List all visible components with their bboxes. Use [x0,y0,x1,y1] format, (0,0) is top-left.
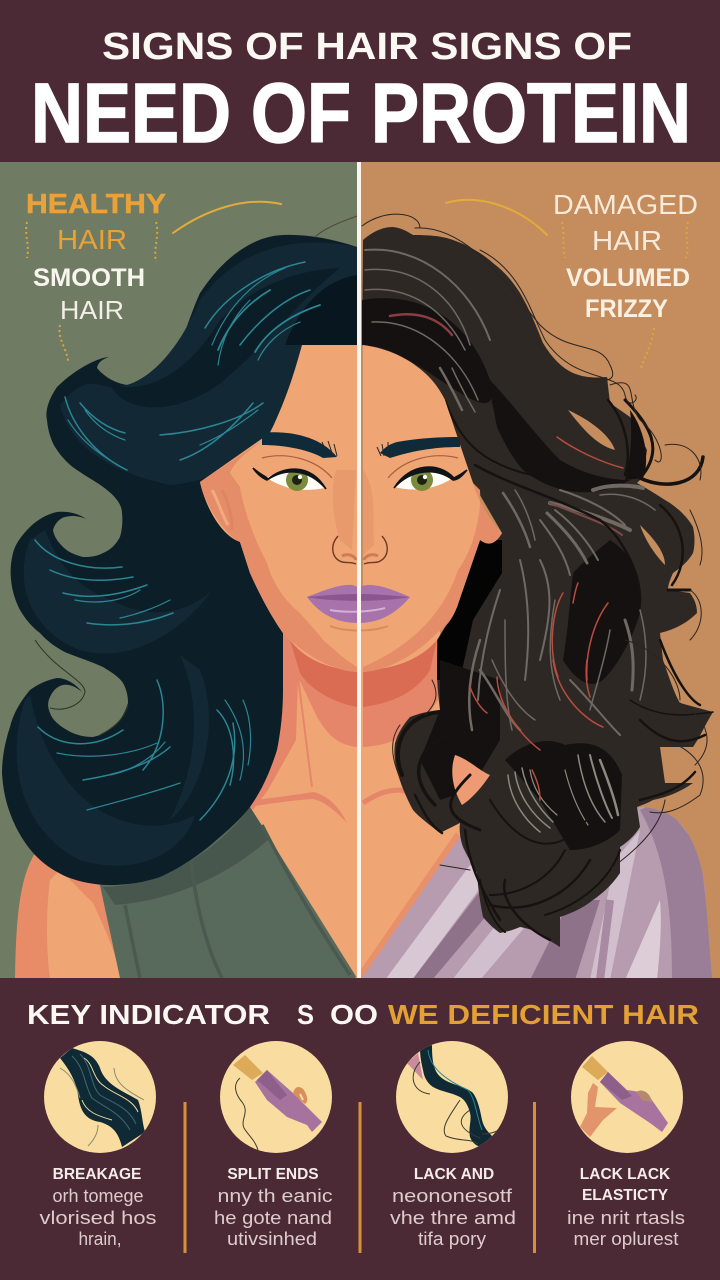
hair: strands over forehead [368,346,531,476]
text: breakage: vlorised hos [40,1208,156,1228]
icon: lack hair strand [396,1041,508,1153]
label: damaged and frizzy hair: HAIR [592,225,662,256]
illustration: split portrait [2,214,720,980]
section heading: key indicators: OO [330,999,378,1030]
nose [333,536,387,564]
hair: left flyaway curl [35,640,128,735]
text: lack and [390,1166,516,1249]
text: lack elasticity: mer oplurest [574,1229,678,1249]
label: healthy and smooth hair [26,188,166,325]
text: lack elasticity: ine nrit rtasls [567,1208,685,1228]
decorative gold dotted marks [26,222,688,368]
section heading: key indicators: S [297,999,314,1030]
text: breakage: orh tomege [52,1186,144,1206]
right eye [388,456,467,491]
section heading: key indicators [27,999,699,1030]
center divider [357,162,361,978]
label: damaged and frizzy hair: DAMAGED [553,189,698,220]
hair: flyaway strands [315,214,707,870]
text: lack and: tifa pory [418,1229,486,1249]
text: split ends: SPLIT ENDS [227,1166,319,1183]
face [200,345,502,672]
label: healthy and smooth hair: HAIR [57,224,127,255]
hair: left shaded bands [17,242,357,866]
clothing: lilac shawl [355,800,720,980]
section heading: key indicators: KEY INDICATOR [27,999,270,1030]
left eyebrow [262,432,337,458]
panel: healthy background [0,162,357,978]
hair: dark curled locks [398,400,713,940]
label: healthy and smooth hair: HEALTHY [26,188,166,219]
dividers [184,1102,536,1253]
text: lack elasticity [567,1166,685,1249]
label: damaged and frizzy hair [553,189,698,323]
hair highlights: grey strands [365,250,655,832]
hair: right gaps showing background [568,410,665,565]
title [31,26,691,160]
clothing: green dress [100,807,357,978]
hair highlights: lower curl fans [508,755,618,832]
text: lack and: vhe thre amd [390,1208,516,1228]
lips [307,585,410,630]
skin gap between curls [452,755,490,805]
icon: left ear [210,490,230,526]
body: neck and chest [15,620,470,978]
hair: left smooth dark teal [2,235,357,885]
icon: breakage hair [44,1041,156,1153]
text: lack and: LACK AND [414,1166,494,1183]
text: lack elasticity: LACK LACK [580,1166,671,1183]
hair highlights: red strands [390,314,623,800]
text: split ends: nny th eanic [218,1186,332,1206]
text: split ends: he gote nand [214,1208,332,1228]
section heading: key indicators: WE DEFICIENT HAIR [388,999,699,1030]
face: contour shadows [200,437,357,672]
panel: damaged background [361,162,720,978]
left eye [253,456,332,491]
hair highlights: teal strands [35,262,320,820]
text: breakage: BREAKAGE [53,1166,141,1183]
label: healthy and smooth hair: HAIR [60,295,124,325]
text: breakage [40,1166,156,1249]
decorative gold arcs [173,200,547,235]
icon: split ends tool [220,1041,332,1153]
label: healthy and smooth hair: SMOOTH [33,264,145,292]
text: split ends: utivsinhed [227,1229,317,1249]
right eyebrow [377,437,460,458]
icon: elasticity tool and hand [571,1041,683,1153]
text: split ends [214,1166,332,1249]
text: lack and: neononesotf [392,1186,513,1206]
text: lack elasticity: ELASTICTY [582,1187,669,1204]
hair: right black shadow masses [362,298,646,850]
title: SIGNS OF HAIR SIGNS OF [102,26,632,68]
text: breakage: hrain, [78,1229,122,1249]
label: damaged and frizzy hair: FRIZZY [585,295,668,323]
label: damaged and frizzy hair: VOLUMED [566,264,690,292]
body: left shoulder [15,853,120,978]
hair: right frizzy dark brown [315,214,713,947]
